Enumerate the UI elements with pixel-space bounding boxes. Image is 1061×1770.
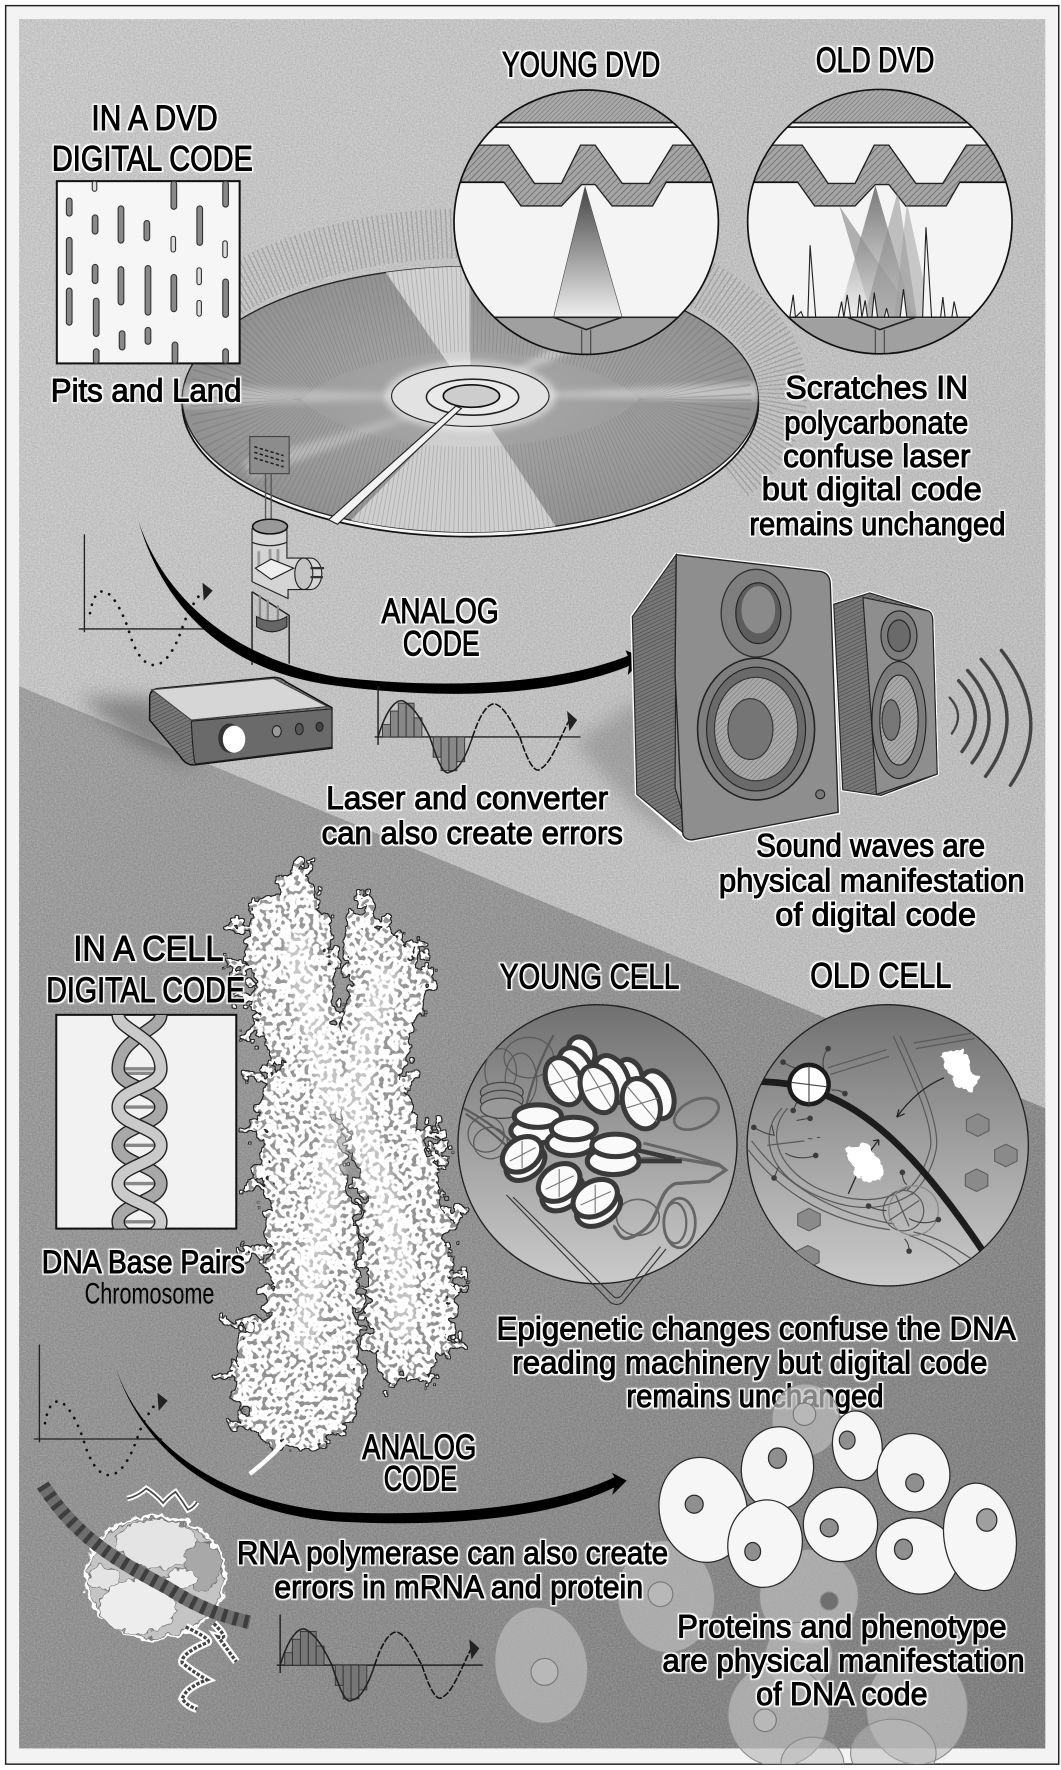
chart: analog sine wave, cell (277, 1615, 483, 1701)
heading: in a DVD digital code: DIGITAL CODE (52, 139, 253, 178)
text: epigenetic changes: Epigenetic changes confuse the DNA (497, 1309, 1016, 1346)
text: sound waves are physical: physical manifestation (719, 861, 1025, 898)
icon: old DVD magnifier (743, 84, 1014, 363)
icon: young DVD magnifier (450, 84, 720, 362)
text: proteins and phenotype: of DNA code (756, 1675, 928, 1712)
text: RNA polymerase errors: errors in mRNA and protein (274, 1568, 643, 1605)
sketch hatching around the disc (214, 233, 783, 478)
heading: in a DVD digital code: IN A DVD (91, 99, 218, 138)
text: laser and converter errors: Laser and converter (326, 779, 608, 816)
heading: analog code: CODE (403, 625, 480, 664)
icon: pickup sample square on disc (250, 437, 289, 474)
arrow: analog code curve to cells (116, 1368, 627, 1523)
text: laser and converter errors (322, 779, 623, 851)
text: sound waves are physical: of digital code (775, 895, 976, 932)
cells: foreground white cells (649, 1408, 1023, 1607)
icon: large speaker (632, 555, 838, 840)
shadow under speakers (574, 698, 686, 844)
heading: old DVD: OLD DVD (816, 41, 934, 80)
heading: young cell: YOUNG CELL (500, 958, 679, 997)
text: epigenetic changes: reading machinery but digital code (512, 1343, 987, 1380)
text: RNA polymerase errors: RNA polymerase can also create (237, 1534, 668, 1571)
text: sound waves are physical (719, 827, 1025, 932)
text: scratches confuse laser: confuse laser (783, 437, 971, 474)
icon: digital to analog converter (150, 677, 332, 765)
heading: in a cell digital code: DIGITAL CODE (46, 971, 245, 1010)
chart: analog sine wave with sampled bars (375, 686, 581, 773)
text: proteins and phenotype: Proteins and phenotype (677, 1607, 1007, 1644)
label: pits and land: Pits and Land (51, 372, 242, 409)
text: proteins and phenotype (662, 1607, 1025, 1712)
icon: small speaker (834, 593, 937, 795)
disc (182, 259, 758, 540)
cells: faded background cells (486, 1384, 968, 1770)
text: proteins and phenotype: are physical manifestation (662, 1641, 1025, 1678)
heading: in a cell digital code (46, 929, 245, 1010)
heading: analog code (381, 592, 499, 664)
panel: DVD digital code pits inset (57, 181, 240, 363)
heading: in a DVD digital code (52, 99, 253, 178)
heading: analog code, cell: CODE (384, 1460, 457, 1499)
icon: young cell nucleosomes (458, 1005, 737, 1305)
chart: digital sine dotted graph, cell (34, 1344, 168, 1475)
text: laser and converter errors: can also create errors (322, 814, 623, 851)
shadow under amplifier (79, 698, 197, 771)
icon: chromosome (221, 857, 461, 1474)
icon: old cell with damage (747, 1005, 1028, 1286)
text: epigenetic changes: remains unchanged (626, 1377, 884, 1414)
text: epigenetic changes (497, 1309, 1016, 1414)
text: sound waves are physical: Sound waves are (756, 827, 985, 864)
text: scratches confuse laser (749, 368, 1005, 542)
panel: DNA double helix inset (55, 1014, 238, 1230)
heading: analog code, cell: ANALOG (362, 1428, 476, 1467)
icon: RNA polymerase (43, 1485, 250, 1709)
text: RNA polymerase errors (237, 1534, 668, 1605)
label: DNA base pairs chromosome: Chromosome (85, 1277, 214, 1310)
arrow: analog code curve to speakers (138, 521, 645, 694)
text: scratches confuse laser: polycarbonate (784, 403, 968, 440)
heading: in a cell digital code: IN A CELL (73, 929, 223, 968)
heading: young DVD: YOUNG DVD (502, 46, 660, 85)
heading: analog code, cell (362, 1428, 476, 1499)
chart: digital sine dotted graph (79, 534, 213, 665)
heading: old cell: OLD CELL (810, 956, 951, 995)
text: scratches confuse laser: Scratches IN (785, 368, 968, 405)
heading: analog code: ANALOG (381, 592, 499, 631)
label: DNA base pairs chromosome (42, 1243, 245, 1310)
icon: laser pickup assembly (252, 474, 324, 665)
text: scratches confuse laser: but digital code (762, 470, 982, 507)
label: DNA base pairs chromosome: DNA Base Pairs (42, 1243, 245, 1280)
icon: sound waves (950, 650, 1031, 785)
text: scratches confuse laser: remains unchanged (749, 505, 1005, 542)
panel: cell section background (19, 686, 1045, 1748)
